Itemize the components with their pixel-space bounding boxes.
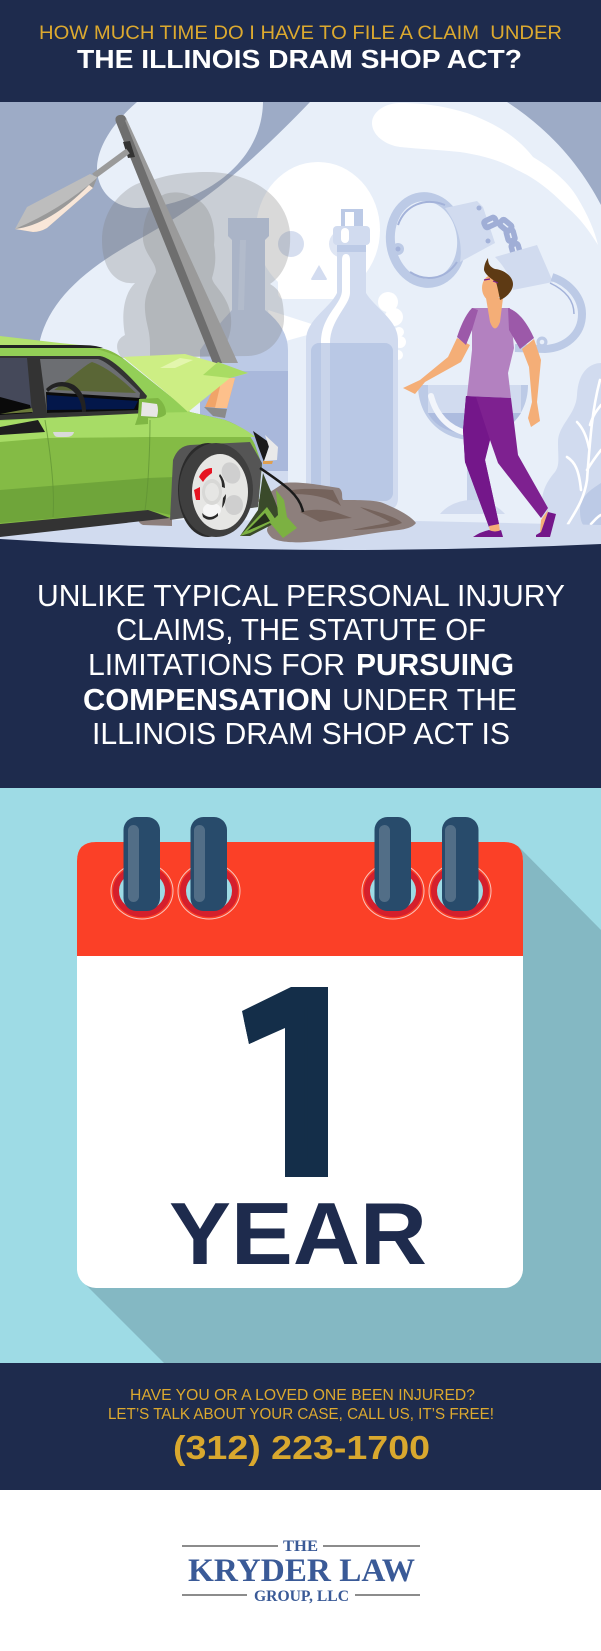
door handle: [53, 432, 74, 437]
panel: statement: [0, 539, 601, 788]
smoke cloud: [102, 172, 290, 358]
side mirror: [135, 398, 166, 425]
statement text: UNDER THE: [342, 683, 517, 717]
oil puddle: [138, 483, 416, 542]
person trousers: [463, 396, 548, 527]
swoosh: [372, 103, 598, 245]
black wire: [260, 468, 303, 512]
icon: skull: [256, 162, 380, 344]
crumpled bumper: [240, 473, 297, 538]
street lamp: [15, 115, 238, 418]
icon: handcuffs: [380, 187, 582, 349]
person right arm: [522, 339, 541, 427]
ground: [0, 520, 601, 552]
wheel: [178, 443, 253, 537]
statement text: [37, 579, 565, 751]
year label: YEAR: [169, 1184, 427, 1283]
binder rings: [111, 817, 491, 919]
green car: [0, 336, 303, 538]
icon: bubbles: [378, 292, 406, 360]
statement text: UNLIKE TYPICAL PERSONAL INJURY: [37, 579, 565, 613]
panel: call to action: [0, 1363, 601, 1490]
logo: The Kryder Law Group: KRYDER LAW: [188, 1553, 415, 1589]
cta text line two: LET’S TALK ABOUT YOUR CASE, CALL US, IT’S FREE!: [108, 1406, 494, 1423]
icon: plant: [542, 363, 601, 526]
large number 1: 1: [224, 931, 375, 1235]
person shoes: [473, 510, 556, 537]
icon: left bottle: [200, 218, 288, 501]
statement text: ILLINOIS DRAM SHOP ACT IS: [92, 717, 510, 751]
calendar: [77, 817, 523, 1288]
icon: center bottle: [306, 209, 398, 510]
statement text: LIMITATIONS FOR: [88, 648, 345, 682]
logo: The Kryder Law Group: THE: [283, 1538, 318, 1555]
statement text: CLAIMS, THE STATUTE OF: [116, 613, 486, 647]
headlight: [253, 431, 278, 464]
person left arm: [403, 338, 470, 394]
panel: header: [0, 0, 601, 102]
statement text: PURSUING: [356, 648, 514, 682]
cta text: HAVE YOU OR A LOVED ONE BEEN INJURED?: [130, 1387, 475, 1404]
logo: The Kryder Law Group: GROUP, LLC: [254, 1588, 349, 1605]
person walking: [403, 258, 556, 537]
wheel arch: [170, 442, 262, 520]
panel: calendar section: [0, 788, 601, 1363]
heading: act name: THE ILLINOIS DRAM SHOP ACT?: [77, 44, 522, 74]
icon: goblet: [418, 385, 528, 514]
person shirt: [457, 308, 534, 398]
logo: The Kryder Law Group: [182, 1538, 420, 1605]
raised hood: [123, 354, 248, 412]
car windows: [0, 356, 147, 420]
person neck and head: [482, 258, 513, 328]
phone number: (312) 223-1700: [173, 1429, 430, 1466]
panel: illustration of car crash: [0, 102, 601, 552]
heading: question line: HOW MUCH TIME DO I HAVE TO FILE A CLAIM UNDER: [39, 22, 562, 44]
statement text: COMPENSATION: [83, 683, 332, 717]
calendar long shadow: [84, 846, 601, 1363]
